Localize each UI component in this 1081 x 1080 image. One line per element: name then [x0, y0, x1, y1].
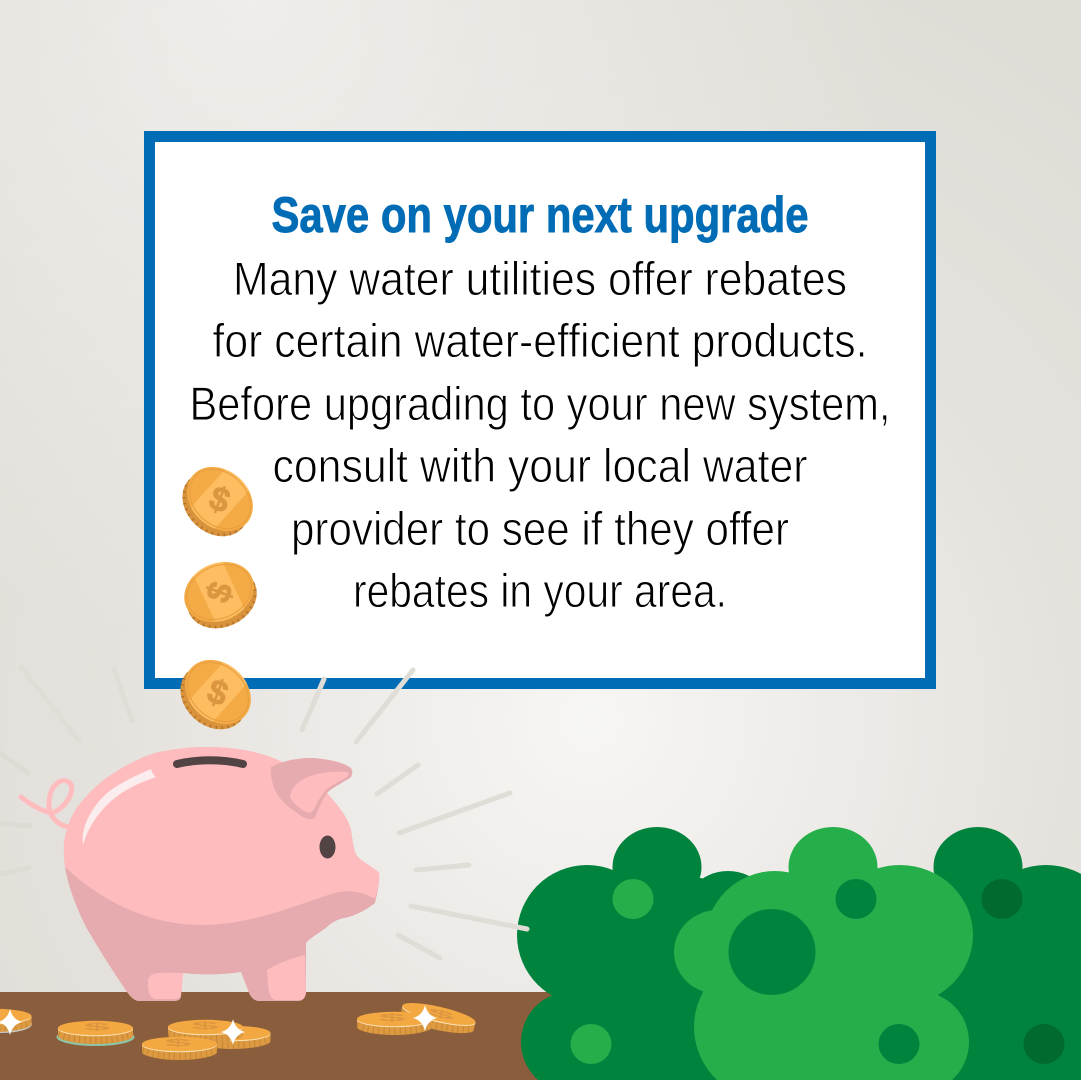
- shrub spots: right: [982, 879, 1064, 1064]
- coin on ground with teal shadow: $: [84, 1021, 110, 1032]
- pig highlight: [83, 769, 156, 845]
- heading: Save on your next upgrade: [272, 187, 808, 243]
- pig front foot: [267, 955, 306, 1000]
- shrub spots: left: [570, 879, 654, 1064]
- falling coin 2: $: [199, 577, 241, 608]
- coin pair, right: $: [379, 1012, 405, 1023]
- body text: rebates in your area.: [353, 564, 727, 617]
- coin on ground, far left: [0, 1009, 32, 1033]
- sparkles: [0, 1005, 437, 1045]
- pig back foot: [148, 973, 183, 999]
- pig ear: [271, 758, 352, 819]
- pig eye: [320, 836, 336, 858]
- panel: rebate message box: [150, 136, 930, 684]
- shrub: left dark: [517, 827, 778, 1080]
- ground: [0, 992, 600, 1080]
- falling coin 3: $: [202, 672, 233, 714]
- pig inner ear: [290, 772, 348, 813]
- pig body shadow: [64, 747, 379, 1001]
- body text: for certain water-efficient products.: [212, 314, 868, 367]
- coin pair, right: [357, 999, 477, 1038]
- pig body light: [64, 747, 379, 925]
- body text: Many water utilities offer rebates: [233, 252, 847, 305]
- coin slot: [177, 760, 243, 764]
- shrub: centre light: [674, 827, 973, 1080]
- pig tail: [21, 781, 72, 827]
- coin on ground with teal shadow: [56, 1021, 134, 1046]
- falling coin 1: [169, 451, 268, 549]
- body text: provider to see if they offer: [291, 502, 789, 555]
- piggy bank: [21, 747, 379, 1001]
- coin stack, centre: [142, 1020, 270, 1060]
- coin pair, right: $: [427, 1006, 455, 1023]
- shrub: right dark: [930, 827, 1081, 1080]
- body text: consult with your local water: [272, 439, 808, 492]
- body text: [190, 252, 890, 617]
- coin stack, centre: $: [192, 1020, 218, 1031]
- falling coin 1: $: [204, 479, 235, 521]
- coin stack, centre: $: [165, 1037, 191, 1048]
- shrub spots: centre: [728, 879, 920, 1064]
- radiating shine lines: [0, 667, 527, 958]
- body text: Before upgrading to your new system,: [190, 377, 890, 430]
- falling coin 2: [173, 548, 267, 639]
- falling coin 3: [167, 644, 266, 742]
